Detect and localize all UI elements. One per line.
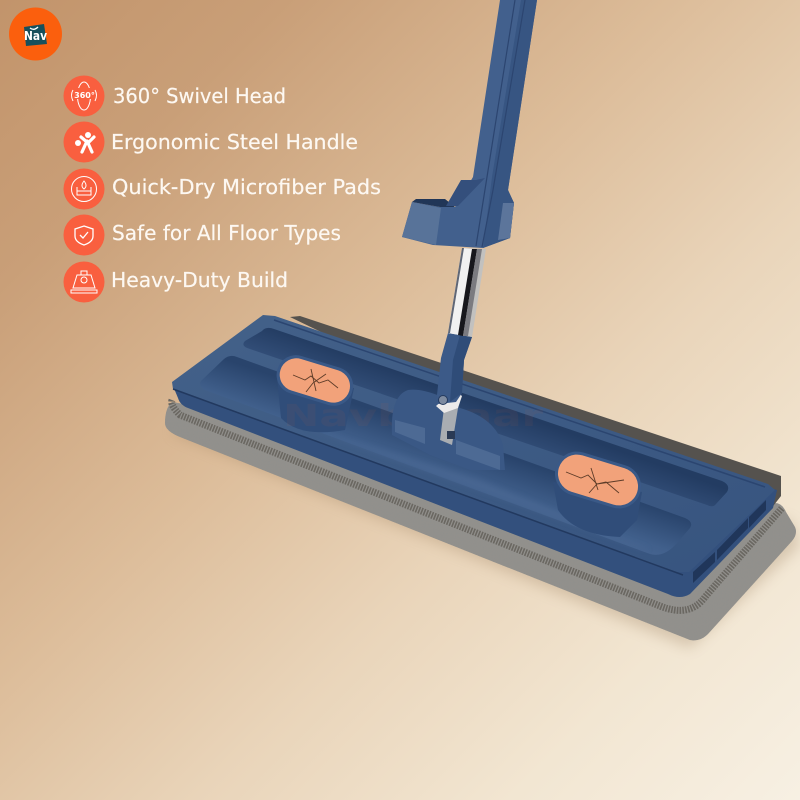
lower well highlight — [300, 425, 650, 550]
upper handle pole — [402, 0, 537, 248]
feature: 360 swivel head: 360° Swivel Head — [113, 84, 286, 108]
feature list — [64, 76, 381, 302]
tray top surface — [172, 315, 775, 572]
feature: ergonomic steel handle: Ergonomic Steel Handle — [111, 130, 358, 154]
feature: ergonomic steel handle — [64, 122, 358, 162]
tray ledge line — [173, 389, 683, 575]
chrome handle shaft — [448, 248, 486, 337]
feature: safe for all floor types: Safe for All Floor Types — [112, 221, 341, 245]
feature: heavy-duty build: Heavy-Duty Build — [111, 268, 288, 292]
feature: quick-dry microfiber pads: Quick-Dry Microfiber Pads — [112, 175, 381, 199]
right orange button — [549, 446, 647, 537]
faint watermark: Navbazaar — [283, 399, 543, 434]
pad coil trim — [172, 400, 782, 610]
lower handle joint — [437, 333, 472, 404]
feature: quick-dry microfiber pads — [64, 168, 381, 210]
left orange button — [272, 350, 358, 432]
brand logo badge: Nav — [24, 29, 47, 43]
floor shadow — [170, 420, 800, 648]
lower inner well — [200, 356, 691, 555]
upper inner well — [243, 328, 728, 506]
tray front and side — [173, 386, 777, 597]
brand logo badge — [9, 8, 62, 60]
product: flat mop — [165, 0, 800, 648]
microfiber pad — [165, 402, 796, 640]
tray end slots — [693, 500, 766, 583]
feature: 360 swivel head: 360° — [74, 91, 95, 100]
feature: 360 swivel head — [64, 76, 286, 116]
tray — [172, 315, 777, 597]
feature: heavy-duty build — [64, 262, 288, 302]
dark rear plate — [290, 316, 781, 510]
feature: safe for all floor types — [64, 214, 341, 256]
swivel hub — [392, 390, 505, 470]
